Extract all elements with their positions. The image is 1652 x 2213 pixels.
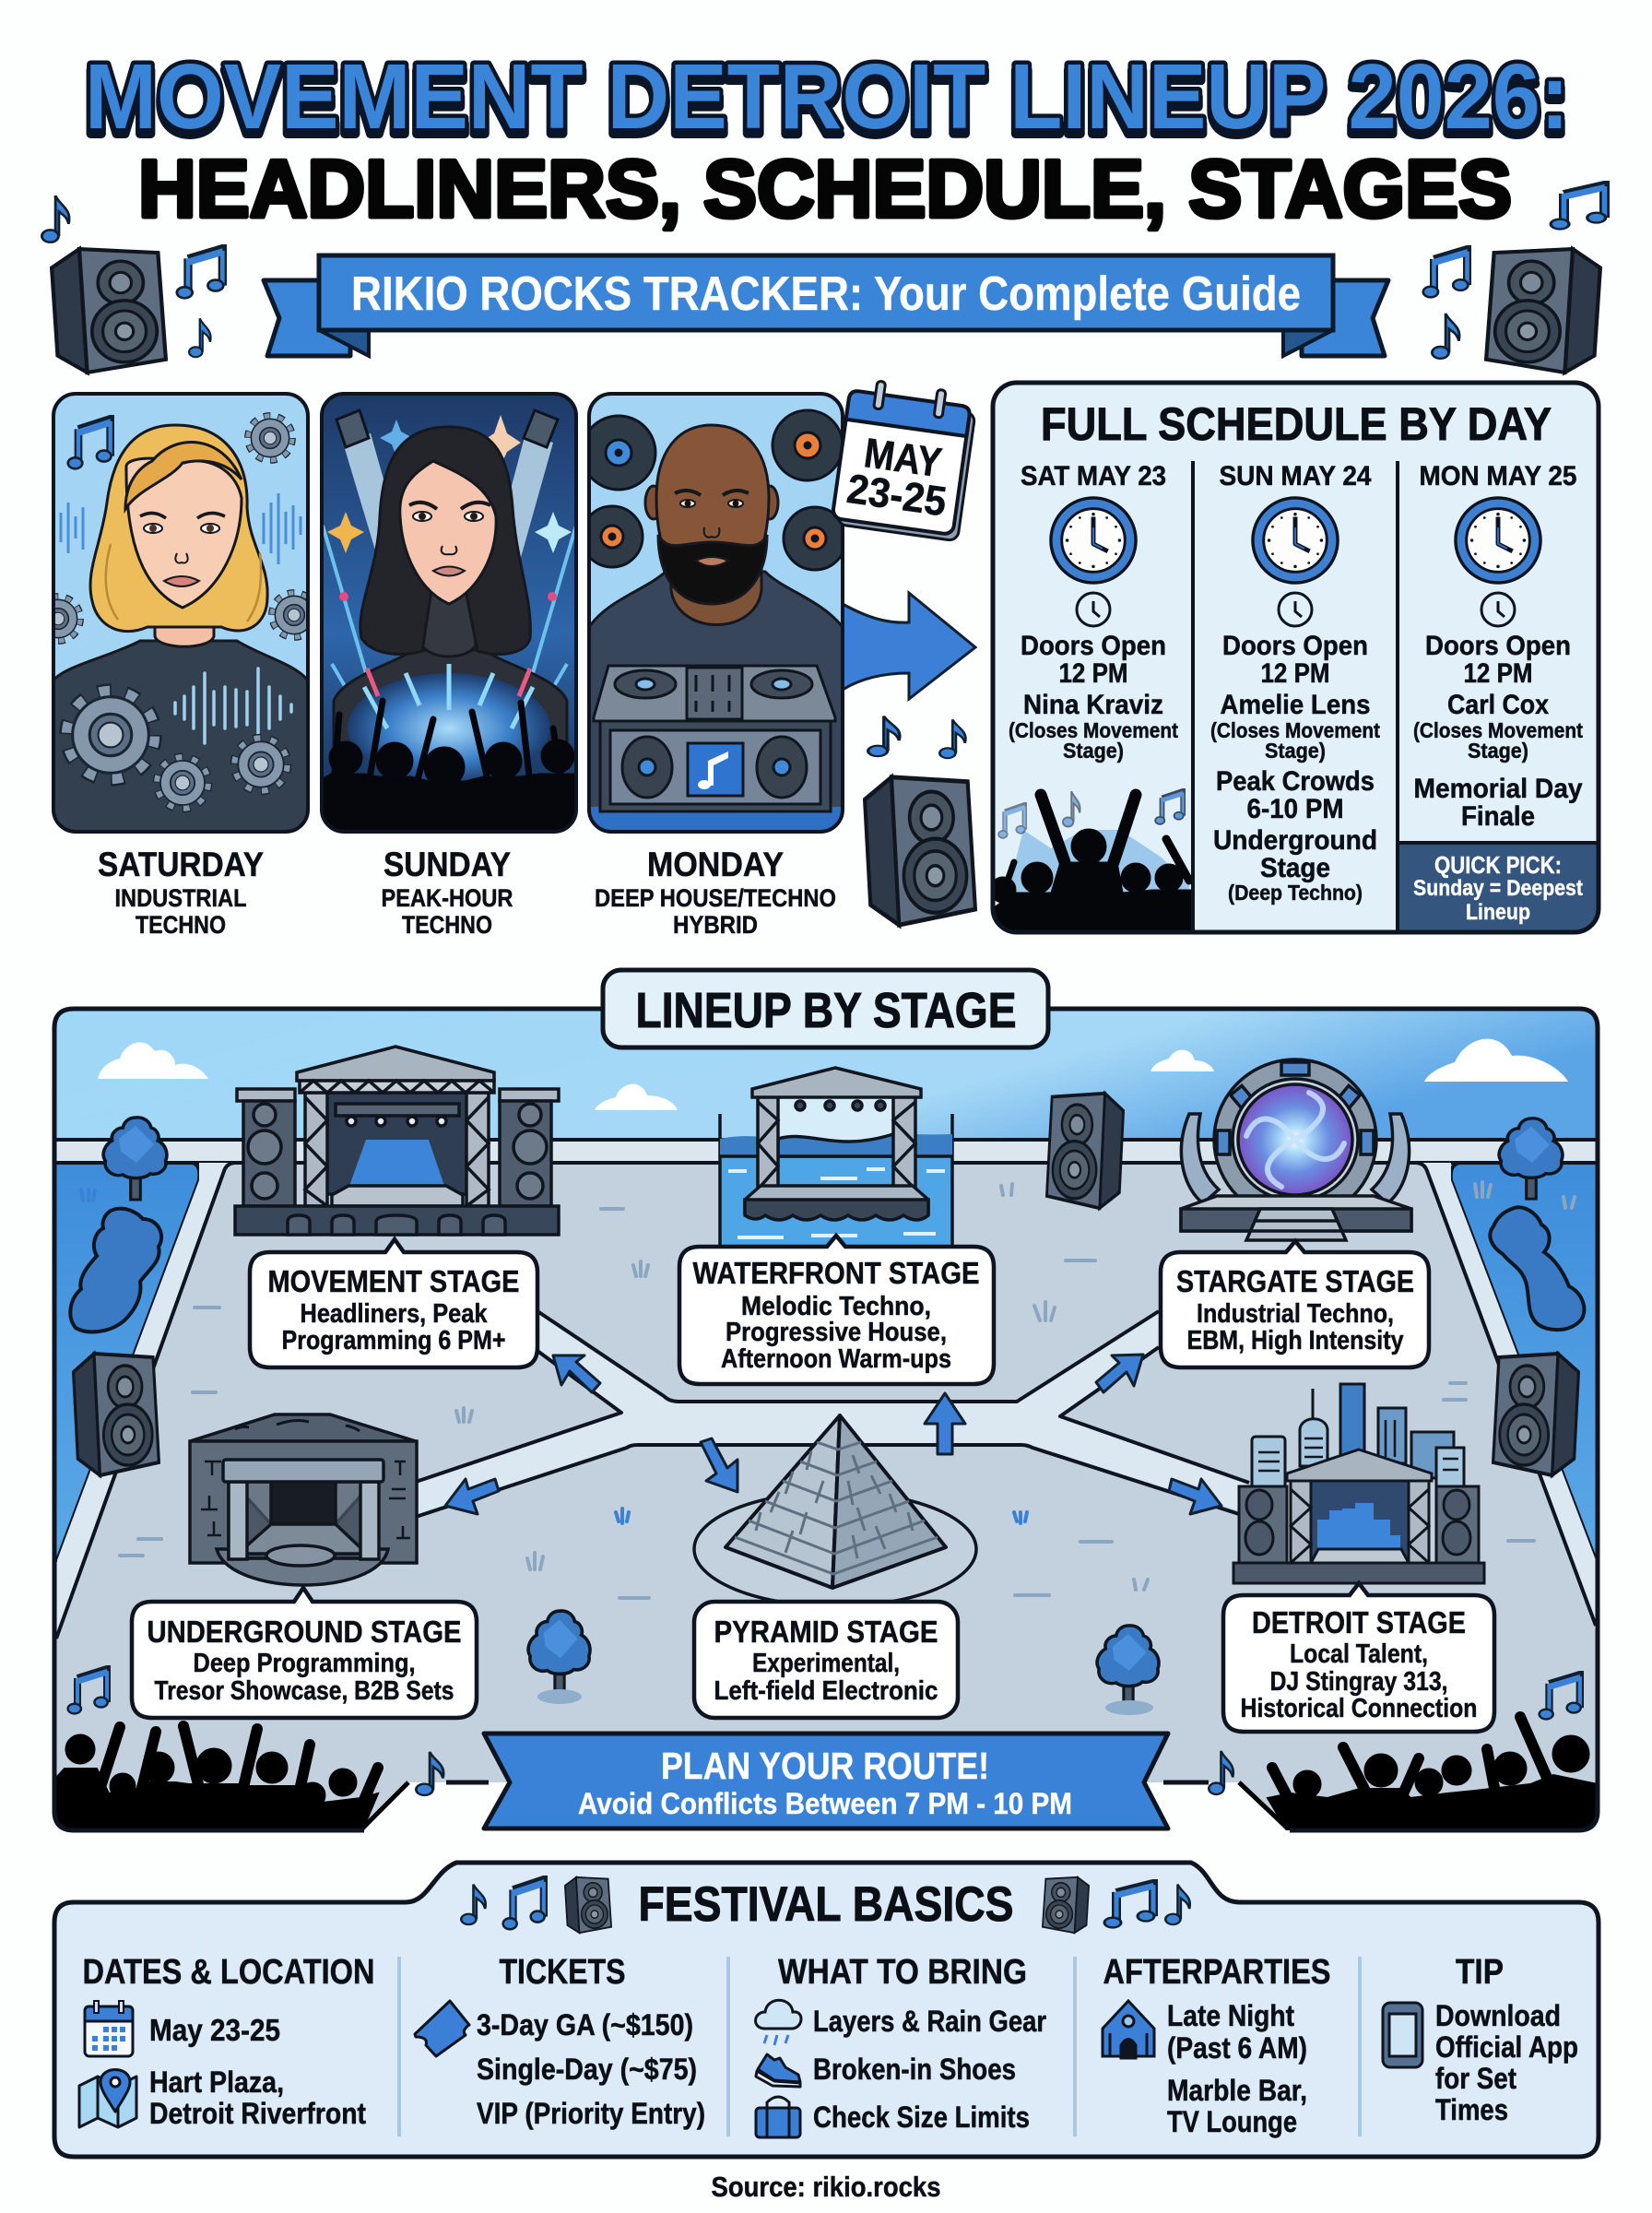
column: monday (1413, 461, 1583, 832)
column: afterparties: Marble Bar, (1167, 2074, 1307, 2107)
column: tip: TIP (1456, 1953, 1504, 1992)
icon: beamed note (177, 248, 223, 298)
sunday label (382, 846, 513, 939)
column: afterparties: (Past 6 AM) (1167, 2031, 1307, 2065)
calendar badge (832, 377, 978, 541)
callout: detroit stage: Historical Connection (1241, 1694, 1477, 1723)
column: tip (1383, 1953, 1578, 2126)
column: dates and location: DATES & LOCATION (83, 1953, 374, 1992)
callout: detroit stage: DJ Stingray 313, (1270, 1667, 1447, 1697)
stage: detroit (1233, 1384, 1484, 1583)
clouds (98, 1039, 1568, 1110)
stage: underground (190, 1414, 417, 1585)
lineup heading (603, 970, 1048, 1047)
icon: right speaker (1486, 249, 1600, 373)
water right (1451, 1163, 1598, 1560)
title (85, 45, 1569, 234)
column: tip: Download (1435, 1999, 1561, 2032)
column: saturday: (Closes Movement (1009, 718, 1178, 742)
portrait: dark-haired woman (334, 427, 567, 751)
column: saturday: Nina Kraviz (1023, 690, 1163, 720)
column: tickets: Single-Day (~$75) (477, 2053, 697, 2086)
column: tip: Times (1435, 2093, 1508, 2126)
vinyl records (582, 410, 846, 570)
callout: detroit stage: DETROIT STAGE (1252, 1605, 1466, 1639)
icon: beamed note (1423, 249, 1468, 297)
icon: map pin (79, 2069, 136, 2127)
map border (54, 1009, 1598, 1830)
column: sunday: 12 PM (1261, 658, 1329, 689)
column: tickets: TICKETS (500, 1953, 625, 1992)
column: saturday: 12 PM (1058, 658, 1128, 689)
column: afterparties: TV Lounge (1167, 2105, 1297, 2138)
callout: movement stage: Programming 6 PM+ (282, 1326, 505, 1355)
monday label: DEEP HOUSE/TECHNO (595, 884, 836, 912)
column: what to bring: Broken-in Shoes (813, 2053, 1016, 2086)
column: tickets (415, 1953, 705, 2130)
card labels (98, 846, 836, 939)
column: what to bring: Check Size Limits (813, 2101, 1030, 2134)
portrait: bearded man (589, 425, 843, 832)
column: monday: MON MAY 25 (1420, 461, 1576, 491)
schedule heading: FULL SCHEDULE BY DAY (1041, 398, 1552, 450)
callout: movement stage (250, 1239, 537, 1367)
arrow: cards to schedule (843, 593, 975, 699)
callout: pyramid stage: PYRAMID STAGE (714, 1615, 938, 1649)
column: what to bring: Layers & Rain Gear (813, 2005, 1046, 2038)
central road (416, 1311, 1249, 1517)
callout: underground stage: Tresor Showcase, B2B Sets (155, 1676, 454, 1706)
cutaway below route ribbon (360, 1782, 1290, 1835)
icon: ticket (415, 2001, 469, 2056)
decorative header notes and speakers (41, 184, 1606, 373)
column: dates and location: May 23-25 (149, 2013, 280, 2047)
saturday label (98, 846, 264, 939)
icon: calendar (85, 2001, 133, 2056)
side path left (57, 1163, 236, 1641)
callout: stargate stage: Industrial Techno, (1197, 1299, 1394, 1329)
icon: trees and bushes (103, 1118, 167, 1200)
sunday label: PEAK-HOUR (382, 884, 513, 912)
callout: pyramid stage: Left-field Electronic (714, 1676, 938, 1706)
plan your route ribbon: Avoid Conflicts Between 7 PM - 10 PM (578, 1787, 1072, 1820)
calendar badge: 23-25 (844, 465, 950, 525)
crowd silhouette (322, 701, 576, 832)
column: sunday: Underground (1213, 825, 1377, 856)
column: sunday: Doors Open (1222, 631, 1368, 661)
title line 1: MOVEMENT DETROIT LINEUP 2026: (85, 51, 1569, 154)
arrow: to movement (553, 1355, 600, 1392)
column: dates and location: Detroit Riverfront (149, 2097, 366, 2130)
column: monday: Doors Open (1425, 631, 1571, 661)
column: sunday: Peak Crowds (1216, 766, 1375, 797)
callout: movement stage: Headliners, Peak (301, 1299, 488, 1329)
quick pick callout: Lineup (1466, 900, 1530, 925)
crowd left (54, 1726, 378, 1835)
panel: festival basics (54, 1863, 1599, 2157)
grass ticks (120, 1182, 1575, 1598)
heading icons (461, 1877, 1190, 1933)
column: tip: for Set (1435, 2062, 1516, 2095)
callout: stargate stage: EBM, High Intensity (1187, 1326, 1403, 1355)
quick pick callout (1413, 851, 1583, 925)
saturday label: INDUSTRIAL (114, 884, 247, 912)
monday label (595, 846, 836, 939)
callout: waterfront stage: Progressive House, (726, 1318, 947, 1347)
portrait: blonde woman (53, 425, 308, 832)
banner text: RIKIO ROCKS TRACKER: Your Complete Guide (351, 267, 1301, 321)
monday label: MONDAY (647, 846, 784, 883)
icon: speaker (865, 777, 975, 925)
column: dates and location (79, 1953, 374, 2130)
column: afterparties: AFTERPARTIES (1103, 1953, 1331, 1992)
panel: full schedule (990, 383, 1599, 932)
callout: movement stage: MOVEMENT STAGE (267, 1264, 520, 1298)
callout: detroit stage: Local Talent, (1290, 1639, 1428, 1669)
sunday label: SUNDAY (384, 846, 511, 883)
stage: stargate (1181, 1059, 1411, 1240)
panel: saturday card (55, 396, 306, 830)
quick pick background (1399, 843, 1599, 932)
saturday label: TECHNO (136, 911, 226, 939)
title line 2: HEADLINERS, SCHEDULE, STAGES (138, 143, 1512, 234)
column: saturday: SAT MAY 23 (1021, 461, 1166, 491)
saturday label: SATURDAY (98, 846, 264, 883)
ribbon banner (264, 255, 1388, 356)
crowd right (1268, 1717, 1598, 1835)
column: monday: Stage) (1468, 739, 1528, 763)
plan your route ribbon (484, 1734, 1168, 1828)
column: monday: Finale (1461, 801, 1535, 832)
water left (54, 1163, 199, 1560)
column: monday: Memorial Day (1414, 774, 1583, 804)
calendar badge: MAY (861, 429, 945, 486)
icon: beamed note (1551, 184, 1606, 229)
quick pick callout: Sunday = Deepest (1413, 876, 1583, 901)
icon: phone (1383, 2003, 1422, 2067)
icons: map notes (68, 1669, 1581, 1795)
icon: venue (1103, 2001, 1154, 2058)
column: sunday: SUN MAY 24 (1219, 461, 1372, 491)
stage: movement (235, 1047, 559, 1235)
column: monday: (Closes Movement (1413, 718, 1583, 742)
small notes (998, 805, 1025, 838)
icon: note (189, 318, 211, 357)
icon: note (868, 716, 900, 756)
column: sunday: Stage (1260, 853, 1330, 883)
icon: left speaker (52, 249, 166, 373)
callout: detroit stage (1223, 1583, 1494, 1732)
callout: underground stage: UNDERGROUND STAGE (148, 1615, 461, 1649)
callout: waterfront stage (679, 1236, 994, 1384)
map arrows (445, 1355, 1221, 1514)
callout: pyramid stage: Experimental, (752, 1649, 900, 1678)
quick pick callout: QUICK PICK: (1434, 851, 1562, 879)
arrow: to underground (445, 1479, 499, 1514)
column: saturday: Doors Open (1021, 631, 1166, 661)
callout: waterfront stage: Melodic Techno, (741, 1292, 931, 1321)
arrow: to stargate (1096, 1355, 1143, 1392)
callout: pyramid stage (694, 1602, 958, 1718)
column: dates and location: Hart Plaza, (149, 2065, 284, 2099)
icon: speakers (74, 1354, 159, 1475)
column: sunday: (Closes Movement (1210, 718, 1380, 742)
column: sunday: Amelie Lens (1221, 690, 1370, 720)
icon: note (1432, 314, 1459, 359)
arrow: to pyramid (701, 1438, 738, 1492)
column: tickets: VIP (Priority Entry) (477, 2097, 705, 2130)
crowd in saturday column (990, 791, 1599, 932)
callout: underground stage: Deep Programming, (194, 1649, 415, 1678)
callout: waterfront stage: WATERFRONT STAGE (693, 1256, 979, 1290)
icon: note (41, 195, 69, 243)
callout: stargate stage: STARGATE STAGE (1176, 1264, 1414, 1298)
column: what to bring (756, 1953, 1046, 2137)
icon: note (68, 419, 112, 468)
lineup heading: LINEUP BY STAGE (636, 983, 1016, 1038)
column: afterparties: Late Night (1167, 1999, 1294, 2032)
column: monday: Carl Cox (1447, 690, 1549, 720)
stage: waterfront (720, 1068, 952, 1247)
icon: shoe (756, 2054, 800, 2087)
column: saturday (1009, 461, 1178, 763)
icon: rain cloud (756, 2000, 801, 2045)
column: monday: 12 PM (1464, 658, 1532, 689)
arrow: to detroit (1169, 1479, 1221, 1514)
callout: waterfront stage: Afternoon Warm-ups (721, 1344, 951, 1374)
panel: monday card (582, 394, 846, 834)
callout: underground stage (132, 1588, 477, 1718)
source line: Source: rikio.rocks (712, 2171, 940, 2203)
icon: bag (756, 2097, 800, 2137)
arrow: to waterfront (925, 1393, 965, 1454)
monday label: HYBRID (673, 911, 758, 939)
sunday label: TECHNO (402, 911, 492, 939)
column: tickets: 3-Day GA (~$150) (477, 2008, 693, 2041)
column: sunday: (Deep Techno) (1228, 881, 1363, 905)
title line 1: MOVEMENT DETROIT LINEUP 2026: (85, 45, 1569, 148)
column: tip: Official App (1435, 2030, 1578, 2064)
screen note (708, 751, 728, 786)
icon: note (939, 719, 965, 758)
spotlights (336, 410, 558, 447)
icons beside speaker (865, 716, 975, 925)
column: afterparties (1103, 1953, 1331, 2138)
column: sunday: 6-10 PM (1246, 794, 1344, 824)
callout: stargate stage (1161, 1241, 1429, 1367)
panel: sunday card (322, 394, 576, 832)
panel: lineup by stage map (54, 970, 1598, 1835)
column: what to bring: WHAT TO BRING (778, 1953, 1027, 1992)
column: saturday: Stage) (1063, 739, 1124, 763)
dj mixer (594, 666, 835, 811)
stage: pyramid (694, 1415, 976, 1606)
plan your route ribbon: PLAN YOUR ROUTE! (661, 1745, 989, 1787)
column: sunday: Stage) (1265, 739, 1326, 763)
side path right (1415, 1163, 1596, 1632)
festival heading: FESTIVAL BASICS (638, 1877, 1014, 1932)
column: sunday (1210, 461, 1380, 905)
